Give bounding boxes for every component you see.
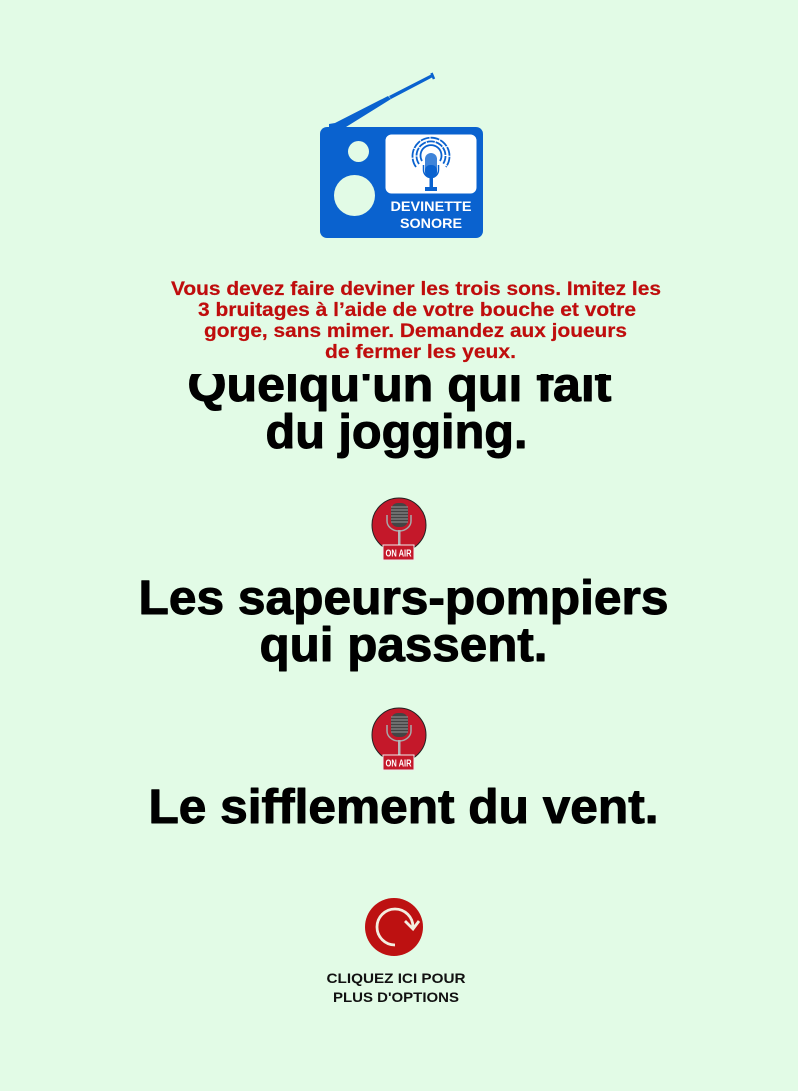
instructions text: de fermer les yeux. [325,342,516,363]
icon: replay button [365,898,423,956]
sound 1: jogging [189,374,612,458]
options link text: CLIQUEZ ICI POUR [326,970,466,986]
radio screen [386,134,476,194]
instructions text: 3 bruitages à l’aide de votre bouche et votre [198,300,636,321]
sound 2: sapeurs-pompiers: qui passent. [260,619,548,672]
radio label: SONORE [400,215,462,231]
instructions text: Vous devez faire deviner les trois sons. Imitez les [171,279,661,300]
sound 3: vent: Le sifflement du vent. [148,781,658,834]
radio antenna [329,74,433,127]
sound 1: jogging: Quelqu'un qui fait [188,359,612,412]
speakers [334,141,375,216]
icon: microphone [413,138,450,191]
radio body [320,127,483,238]
options link text: PLUS D'OPTIONS [333,989,459,1005]
icon: radio [320,73,483,238]
icon: on air microphone 1 [372,498,426,560]
instructions text [171,279,661,363]
sound 1: jogging: du jogging. [266,406,528,459]
sound 2: sapeurs-pompiers: Les sapeurs-pompiers [138,572,668,625]
instructions text: gorge, sans mimer. Demandez aux joueurs [204,321,627,342]
radio label: DEVINETTE [390,198,472,214]
sound 2: sapeurs-pompiers [138,572,668,672]
options link text [326,970,466,1005]
icon: on air microphone 2 [372,708,426,770]
